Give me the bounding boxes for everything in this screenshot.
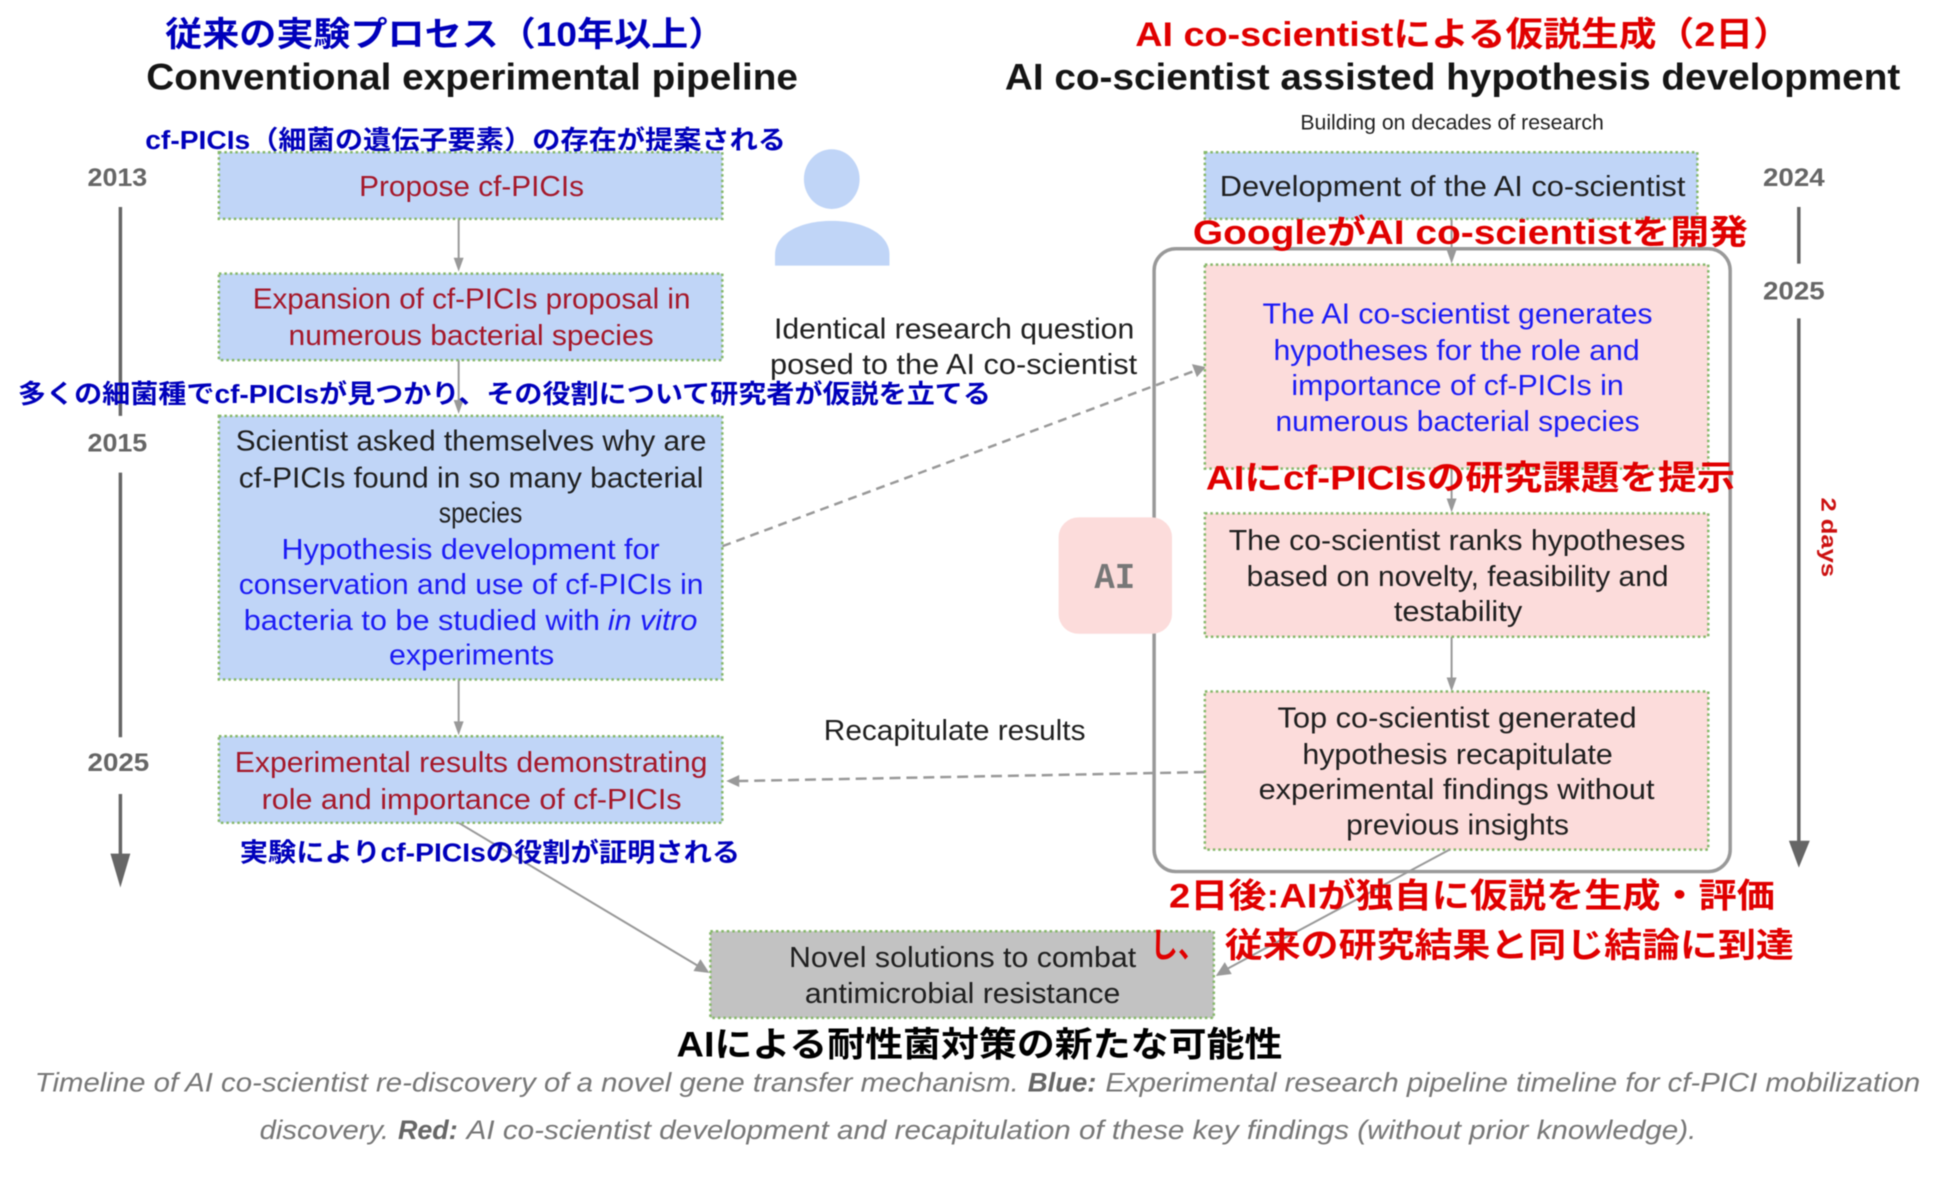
annotation: research task given to AI: AIにcf-PICIsの研究課題を提示: [1206, 460, 1735, 498]
label: identical research question: [770, 313, 1137, 381]
heading: conventional pipeline Japanese: 従来の実験プロセス（10年以上）: [165, 16, 725, 54]
AI process rounded container: [1154, 249, 1730, 872]
panel: expansion of proposal: [219, 274, 722, 360]
annotation: new possibilities: AIによる耐性菌対策の新たな可能性: [677, 1026, 1282, 1065]
dashed arrow: recapitulate results: [726, 772, 1205, 787]
panel: experimental results: Experimental results demonstrating: [235, 747, 707, 779]
panel: hypothesis development: cf-PICIs found in so many bacterial: [239, 463, 703, 495]
panel: propose cf-PICIs: [219, 152, 722, 219]
panel: recapitulate findings: Top co-scientist generated: [1277, 702, 1637, 734]
annotation: two days later: [1150, 876, 1794, 965]
caption: Experimental research pipeline timeline for cf-PICI mobilization: [1105, 1067, 1920, 1097]
year labels right: 2025: [1763, 277, 1825, 305]
panel: expansion of proposal: numerous bacterial species: [289, 320, 654, 352]
panel: hypothesis development: conservation and use of cf-PICIs in: [239, 569, 703, 601]
panel: experimental results: role and importance of cf-PICIs: [262, 784, 682, 816]
caption: AI co-scientist development and recapitulation of these key findings (without prior knowledge).: [464, 1115, 1696, 1145]
panel: hypothesis development: experiments: [389, 640, 554, 672]
label: 2 days: 2 days: [1817, 497, 1840, 577]
icon: person: [775, 149, 889, 266]
annotation: two days later: し、: [1150, 927, 1206, 965]
dashed arrow: research question to AI: [722, 364, 1206, 546]
heading: AI co-scientist English: AI co-scientist assisted hypothesis development: [1005, 57, 1900, 98]
panel: development of AI co-scientist: [1205, 152, 1697, 219]
caption: Timeline of AI co-scientist re-discovery of a novel gene transfer mechanism.: [35, 1067, 1019, 1097]
arrow: recapitulated findings to novel solutions: [1216, 850, 1450, 976]
panel: AI generates hypotheses: numerous bacterial species: [1275, 406, 1640, 438]
panel: recapitulate findings: experimental findings without: [1259, 774, 1655, 806]
panel: recapitulate findings: previous insights: [1346, 810, 1569, 842]
year labels right: [1763, 164, 1825, 305]
panel: ranks hypotheses: The co-scientist ranks hypotheses: [1229, 525, 1685, 557]
panel: novel solutions: antimicrobial resistance: [805, 978, 1120, 1010]
annotation: cf-PICIs proposed: cf-PICIs（細菌の遺伝子要素）の存在が提案される: [145, 125, 786, 155]
caption: Blue:: [1028, 1067, 1096, 1097]
year labels right: 2024: [1763, 164, 1825, 192]
annotation: Google develops AI co-scientist: GoogleがAI co-scientistを開発: [1193, 213, 1748, 252]
year labels left: 2013: [88, 164, 147, 192]
panel: hypothesis development: species: [439, 497, 522, 529]
panel: hypothesis development: [219, 416, 722, 680]
panel: expansion of proposal: Expansion of cf-PICIs proposal in: [253, 283, 690, 315]
heading: conventional pipeline English: Conventional experimental pipeline: [146, 57, 798, 98]
label: recapitulate results: Recapitulate results: [824, 715, 1085, 747]
annotation: researchers hypothesize: 多くの細菌種でcf-PICIsが見つかり、その役割について研究者が仮説を立てる: [18, 379, 991, 409]
caption: [35, 1067, 1920, 1145]
heading: AI co-scientist Japanese: AI co-scientistによる仮説生成（2日）: [1135, 16, 1791, 54]
icon: AI badge: [1059, 517, 1172, 634]
year labels left: [88, 164, 149, 777]
year labels left: 2025: [88, 749, 149, 777]
panel: ranks hypotheses: testability: [1394, 596, 1523, 628]
panel: recapitulate findings: [1205, 691, 1708, 850]
caption: discovery.: [260, 1115, 389, 1145]
panel: ranks hypotheses: based on novelty, feasibility and: [1247, 561, 1668, 593]
panel: recapitulate findings: hypothesis recapitulate: [1302, 739, 1613, 771]
panel: development of AI co-scientist: Development of the AI co-scientist: [1220, 171, 1685, 203]
annotation: two days later: 2日後:AIが独自に仮説を生成・評価: [1169, 876, 1775, 915]
caption: Red:: [398, 1115, 458, 1145]
flow arrows right column: [1447, 219, 1457, 691]
year labels left: 2015: [88, 430, 147, 458]
panel: experimental results: [219, 736, 722, 823]
panel: hypothesis development: bacteria to be studied with: [244, 605, 600, 637]
panel: propose cf-PICIs: Propose cf-PICIs: [359, 171, 584, 203]
left timeline arrow: [110, 207, 130, 887]
panel: hypothesis development: in vitro: [608, 605, 697, 637]
right timeline arrow: [1789, 207, 1810, 868]
arrow: experimental results to novel solutions: [459, 823, 709, 973]
panel: ranks hypotheses: [1205, 513, 1708, 637]
panel: AI generates hypotheses: hypotheses for the role and: [1274, 335, 1640, 367]
panel: hypothesis development: Scientist asked themselves why are: [236, 426, 706, 458]
panel: novel solutions: Novel solutions to combat: [789, 942, 1136, 974]
panel: hypothesis development: Hypothesis development for: [282, 534, 660, 566]
label: building on decades: Building on decades of research: [1300, 111, 1604, 134]
flow arrows left column: [454, 219, 464, 735]
annotation: experiments prove role: 実験によりcf-PICIsの役割が証明される: [240, 838, 740, 868]
panel: novel solutions: [710, 931, 1214, 1018]
annotation: two days later: 従来の研究結果と同じ結論に到達: [1225, 927, 1794, 965]
panel: AI generates hypotheses: [1205, 265, 1708, 469]
label: identical research question: posed to the AI co-scientist: [770, 349, 1137, 381]
label: identical research question: Identical research question: [774, 313, 1134, 345]
icon: AI badge: AI: [1094, 558, 1135, 599]
panel: AI generates hypotheses: The AI co-scientist generates: [1263, 298, 1653, 330]
panel: AI generates hypotheses: importance of cf-PICIs in: [1291, 370, 1624, 402]
